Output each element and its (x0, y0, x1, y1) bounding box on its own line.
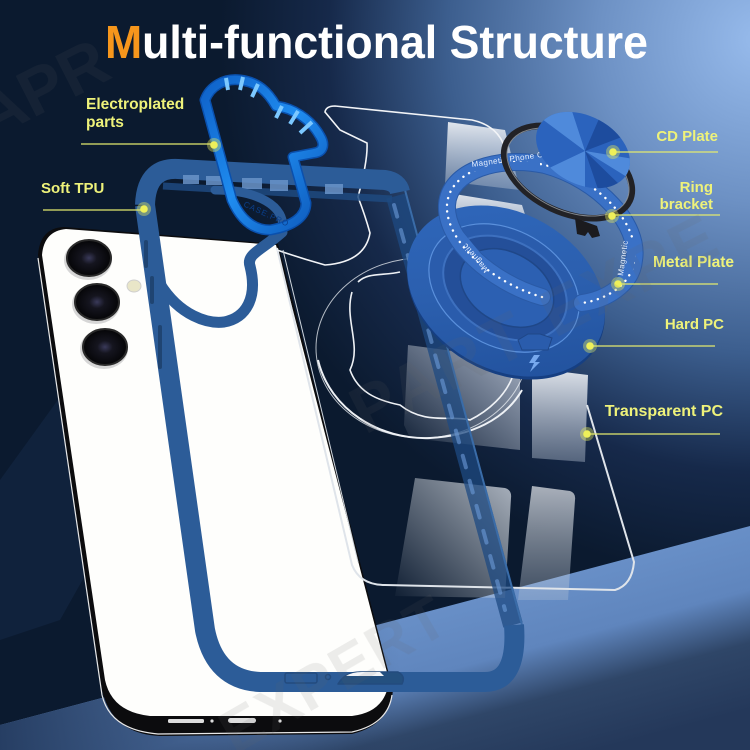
label: ring bracket (605, 179, 720, 223)
case logo: CASE.PRO (242, 200, 291, 229)
phone body (38, 227, 393, 736)
watermark: PART EXPE (338, 198, 732, 447)
label: CD plate: CD Plate (656, 128, 718, 145)
label: hard PC (583, 316, 724, 353)
label: metal plate: Metal Plate (653, 254, 734, 271)
inner grip strip along the top (163, 186, 392, 199)
right rail grip strip (394, 205, 505, 610)
solid left, top and bottom rails (145, 169, 400, 205)
ring bracket (489, 107, 647, 238)
charging port and speaker (168, 718, 282, 723)
label: electroplated parts: Electroplated (86, 96, 184, 113)
translucent right rail (396, 196, 513, 625)
electroplated parts ring (205, 77, 323, 230)
ring lettering: Magnetic Phone Case (471, 148, 558, 169)
bottom ports (285, 672, 403, 684)
CD plate (536, 112, 630, 188)
title: Multi-functional Structure (105, 16, 648, 68)
lightning icon (529, 355, 540, 372)
label: transparent PC: Transparent PC (605, 403, 723, 420)
label: soft TPU (41, 180, 151, 216)
label: ring bracket: bracket (660, 196, 713, 213)
label: soft TPU: Soft TPU (41, 180, 104, 197)
cameras (64, 240, 141, 369)
metal plate ring: Magnetic (461, 241, 491, 274)
label: transparent PC (580, 403, 723, 441)
label: ring bracket: Ring (680, 179, 713, 196)
transparent PC panel (277, 106, 634, 590)
label: electroplated parts: parts (86, 114, 124, 131)
metal plate ring: Magnetic (616, 240, 630, 276)
label: metal plate (611, 254, 734, 291)
label: CD plate (606, 128, 718, 159)
label: hard PC: Hard PC (665, 316, 724, 333)
window light reflections (395, 122, 588, 600)
side buttons (144, 240, 162, 369)
camera cut-out band (160, 232, 282, 322)
label: electroplated parts (81, 96, 221, 152)
magnetic circle on PC panel (316, 258, 528, 438)
metal plate ring (447, 148, 635, 303)
soft TPU bumper frame (144, 169, 522, 684)
hard PC disc (376, 171, 636, 414)
